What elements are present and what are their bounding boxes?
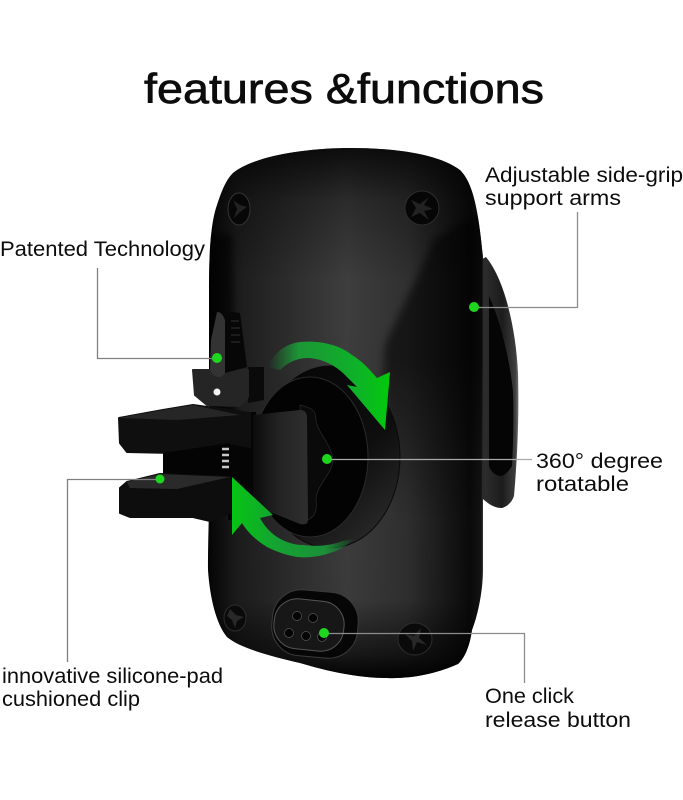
label: adjustable side-grip support arms	[485, 163, 683, 210]
label: one click release button	[485, 684, 631, 732]
screw: bottom right	[398, 623, 432, 655]
arm slot	[489, 296, 513, 476]
clip spine behind the block	[228, 412, 256, 520]
label: patented technology: Patented Technology	[0, 237, 205, 261]
leader line: silicone pad	[68, 480, 160, 662]
leader line: rotatable	[327, 458, 532, 460]
vent clip	[119, 405, 250, 521]
spring	[222, 449, 229, 467]
clip middle	[163, 443, 230, 477]
rotation arrow: bottom	[232, 477, 354, 557]
upper jaw	[119, 405, 250, 453]
rotation arrow: top	[267, 342, 390, 430]
title: features &functions	[144, 65, 544, 112]
marker dot: arm	[469, 302, 479, 312]
release button	[269, 587, 361, 661]
screw: bottom left	[224, 605, 246, 631]
marker dot: lever	[212, 353, 222, 363]
rotating ball joint ring	[252, 366, 400, 548]
label: adjustable side-grip support arms: support arms	[485, 186, 621, 210]
screw: top right	[405, 191, 439, 225]
leader line: side-grip arms	[474, 212, 578, 308]
label: 360 degree rotatable: 360° degree	[536, 449, 663, 473]
label: innovative silicone-pad cushioned clip: innovative silicone-pad	[2, 664, 223, 688]
label: innovative silicone-pad cushioned clip	[2, 664, 223, 711]
label: 360 degree rotatable	[536, 449, 663, 496]
screw: top left	[228, 193, 250, 225]
marker dot: ring	[322, 454, 332, 464]
label: 360 degree rotatable: rotatable	[536, 472, 629, 496]
lower jaw	[120, 474, 230, 521]
marker dot: button	[319, 628, 329, 638]
leader line: patented technology	[98, 268, 215, 358]
phone holder body	[205, 140, 500, 685]
leader line: release button	[324, 634, 524, 683]
lever	[210, 311, 247, 377]
label: adjustable side-grip support arms: Adjustable side-grip	[485, 163, 683, 187]
lever head	[193, 367, 264, 406]
side-grip support arm	[463, 257, 518, 508]
label: one click release button: release button	[485, 708, 631, 732]
clip base block	[253, 410, 308, 524]
marker dot: clip pad	[156, 474, 164, 484]
label: one click release button: One click	[485, 684, 574, 708]
label: innovative silicone-pad cushioned clip: cushioned clip	[2, 687, 140, 711]
